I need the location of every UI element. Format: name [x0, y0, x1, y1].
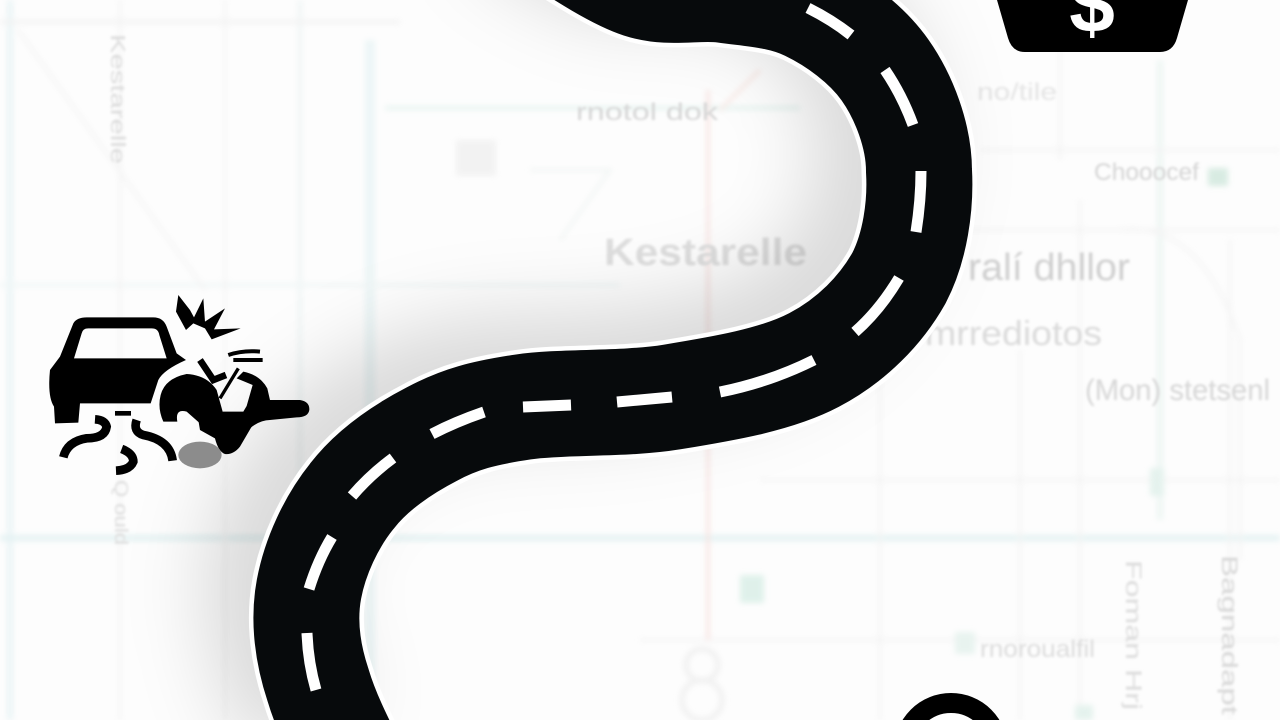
- label: vertical Bagnadapt: Bagnadapt: [1217, 555, 1242, 715]
- badge body: [997, 0, 1188, 52]
- label: vertical Foman Hrj: Foman Hrj: [1121, 560, 1146, 710]
- label: Kestarelle: Kestarelle: [604, 232, 807, 274]
- icon: car crash with scooter: [49, 295, 309, 471]
- label: vertical Kestarelle: Kestarelle: [106, 34, 128, 164]
- label: rnoroualfil: rnoroualfil: [980, 636, 1095, 663]
- label: vertical Q ould: Q ould: [111, 480, 131, 545]
- skid marks: [63, 419, 173, 471]
- oil spot: [178, 442, 222, 468]
- label: ralí dhllor: ralí dhllor: [968, 247, 1130, 289]
- label: rnotol dok: rnotol dok: [576, 99, 719, 126]
- debris dash: [115, 411, 131, 416]
- lane dashes: [307, 8, 921, 690]
- car: [49, 317, 186, 423]
- scooter: [159, 372, 309, 454]
- icon: dollar badge: [997, 0, 1188, 52]
- label: mrrediotos: mrrediotos: [925, 315, 1102, 353]
- label: Chooocef: Chooocef: [1094, 159, 1199, 186]
- road white edge: [306, 0, 919, 720]
- icon: location ring: [904, 703, 998, 720]
- label: no/tile: no/tile: [977, 79, 1057, 106]
- rider and handlebars: [200, 351, 263, 398]
- road shadow: [264, 0, 877, 720]
- impact burst: [176, 295, 241, 339]
- label: Mon stetsenl: (Mon) stetsenl: [1085, 374, 1270, 407]
- winding road: [306, 0, 921, 720]
- road surface: [306, 0, 919, 720]
